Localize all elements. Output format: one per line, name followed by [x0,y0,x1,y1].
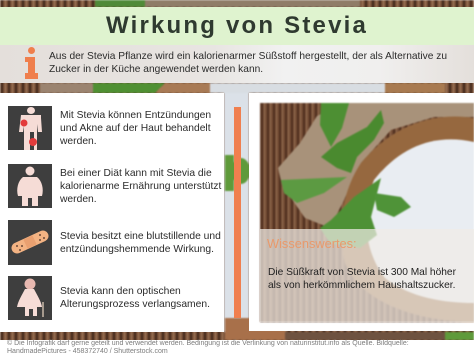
text: ageing [60,286,210,310]
text: wound healing: entzündungshemmende Wirkung. [60,244,214,255]
text: ageing: Alterungsprozess verlangsamen. [60,299,210,310]
text: diet: kalorienarme Ernährung unterstützt [60,181,221,192]
text: wound healing [60,231,221,255]
fact overlay [260,229,474,322]
orange bar [234,107,241,318]
icon: overweight body [8,164,52,208]
fact text: Die Süßkraft von Stevia ist 300 Mal höher [268,267,456,278]
footer credit: © Die Infografik darf gerne geteilt und verwendet werden. Bedingung ist die Verlinkung von naturinstitut.info als Quelle. Bildquelle: [7,340,409,347]
text: skin: werden. [60,136,97,147]
icon: inflamed body [8,106,52,150]
title band [0,7,474,45]
panel: effects [0,93,224,332]
text: skin [60,110,211,147]
photo: stevia leaves and sweetener [259,102,474,323]
fact text: als von herkömmlichem Haushaltszucker. [268,280,455,291]
footer credit: HandmadePictures - 458372740 / Shutterstock.com [7,348,168,354]
text: diet: werden. [60,194,97,205]
text: ageing: Stevia kann den optischen [60,286,181,297]
icon: elderly person [8,276,52,320]
fact text [268,267,456,291]
intro text: Aus der Stevia Pflanze wird ein kalorienarmer Süßstoff hergestellt, der als Alternative zu [49,51,447,62]
text: diet [60,168,222,205]
icon: info [25,47,38,79]
text: skin: Mit Stevia können Entzündungen [60,110,211,121]
intro text: Zucker in der Küche angewendet werden kann. [49,64,263,74]
text: skin: und Akne auf der Haut behandelt [60,123,211,134]
intro band [0,45,474,83]
intro text [49,51,447,74]
title: Wirkung von Stevia [106,12,368,39]
text: diet: Bei einer Diät kann mit Stevia die [60,168,212,179]
footer credit [0,340,474,355]
heading: Wissenswertes: Wissenswertes: [267,236,357,251]
icon: plaster [8,220,52,265]
panel: fact frame [249,93,474,331]
text: wound healing: Stevia besitzt eine blutstillende und [60,231,221,242]
